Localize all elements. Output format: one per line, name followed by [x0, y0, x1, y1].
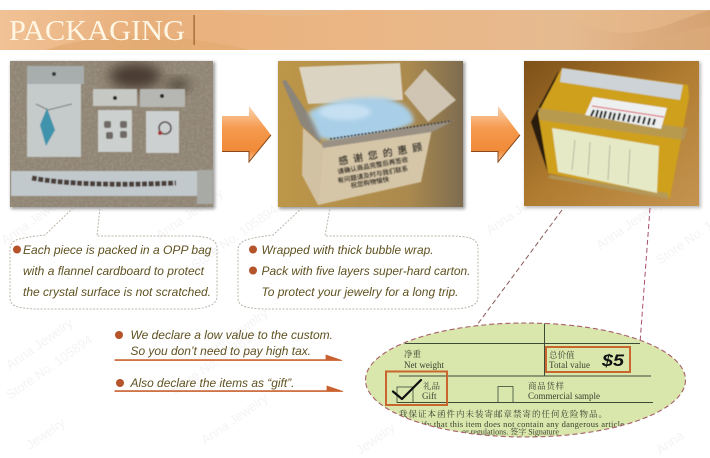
- callout: OPP bag note: with a flannel cardboard to protect: [23, 264, 205, 278]
- value: $5: [601, 351, 625, 370]
- highlight: gift: [386, 372, 447, 405]
- note: low declared value: We declare a low value to the custom.: [130, 328, 333, 342]
- bracelet card: [11, 171, 197, 196]
- background watermarks: Anna Jewelry: [0, 190, 71, 247]
- callout: OPP bag note: Each piece is packed in a OPP bag: [23, 243, 212, 257]
- photo: crystal jewelry in OPP bags: [10, 61, 215, 209]
- callout: bubble wrap and carton note: Wrapped with thick bubble wrap.: [262, 243, 434, 257]
- photo: carton with bubble wrap: 祝您购物愉快: [350, 173, 390, 190]
- note: low declared value: So you don’t need to pay high tax.: [130, 344, 311, 358]
- photo: carton with bubble wrap: 请确认商品完整后再签收: [337, 154, 409, 176]
- callout: OPP bag note: [10, 208, 217, 309]
- callout: bubble wrap and carton note: Pack with five layers super-hard carton.: [262, 264, 470, 278]
- callout: bubble wrap and carton note: To protect your jewelry for a long trip.: [262, 285, 458, 299]
- background watermarks: Anna Jewelry: [593, 195, 666, 252]
- background watermarks: Store No. 105894: [188, 202, 280, 272]
- photo: carton with bubble wrap: 有问题请及时与我们联系: [337, 163, 409, 185]
- arrow: step one to two: [222, 106, 271, 162]
- shipping label: [552, 128, 659, 193]
- background watermarks: Store No. 105894: [168, 327, 260, 397]
- customs form detail ellipse: Net weight: [404, 360, 444, 370]
- banner: [0, 10, 710, 50]
- dashed connectors to form detail: [477, 210, 562, 325]
- background watermarks: Anna Jewelry: [153, 185, 226, 242]
- photo: carton with bubble wrap: [278, 61, 465, 209]
- callout: bubble wrap and carton note: [238, 208, 478, 309]
- barcode sticker: [585, 97, 667, 129]
- callout: OPP bag note: the crystal surface is not scratched.: [23, 285, 211, 299]
- title: PACKAGING: [9, 16, 185, 47]
- background watermarks: Anna: [653, 427, 687, 457]
- carton printed text: 感谢您的惠顾: [337, 138, 423, 168]
- note: declared as gift: Also declare the items as “gift”.: [130, 376, 294, 390]
- declaration text: 我保证本函件内未装寄邮章禁寄的任何危险物品。: [399, 409, 607, 419]
- customs form detail ellipse: Commercial sample: [528, 391, 600, 401]
- note: low declared value: [115, 328, 342, 360]
- customs form detail ellipse: [366, 323, 686, 437]
- total value field: 总价值: [549, 350, 575, 360]
- commercial sample field: 商品货样: [528, 381, 564, 391]
- necklace card: [27, 66, 84, 84]
- gift field: 礼品: [423, 381, 441, 391]
- background watermarks: Anna Jewelry: [3, 315, 76, 372]
- bubble wrap: [308, 98, 414, 142]
- customs form detail ellipse: or regulations. 签字 Signature: [462, 426, 559, 436]
- background watermarks: Anna Jewelry: [633, 80, 706, 137]
- arrow: step two to three: [471, 106, 520, 162]
- net weight field: 净重: [404, 349, 422, 359]
- background watermarks: Anna Jewelry: [483, 180, 556, 237]
- background watermarks: Store No. 105894: [3, 332, 95, 402]
- photo: sealed parcel: [524, 61, 701, 208]
- customs form detail ellipse: I certify that this item does not contain any dangerous article: [402, 419, 624, 429]
- highlight: total value: [546, 347, 630, 372]
- background watermarks: Anna Jewelry: [198, 390, 271, 447]
- customs form detail ellipse: Gift: [422, 391, 437, 401]
- note: declared as gift: [115, 376, 343, 392]
- background watermarks: Jewelry: [353, 420, 398, 457]
- ring card: [140, 89, 185, 107]
- customs form detail ellipse: Total value: [549, 360, 590, 370]
- background watermarks: Anna Jewelry: [198, 305, 271, 362]
- dashed connector right: [640, 208, 650, 343]
- earring card: [93, 89, 137, 106]
- background watermarks: Jewelry: [23, 415, 68, 452]
- icon: check mark: [393, 380, 421, 399]
